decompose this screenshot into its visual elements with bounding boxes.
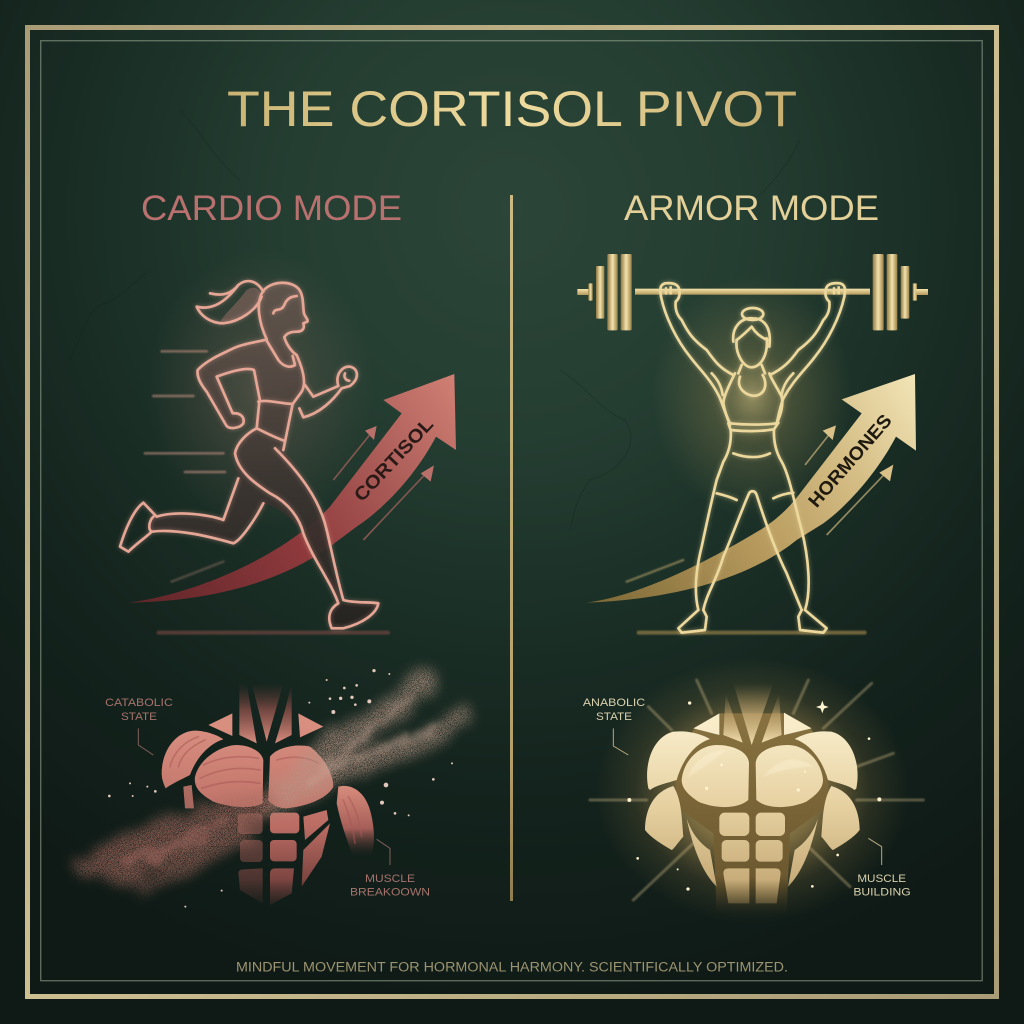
dust wisps lower [120, 820, 227, 867]
title: THE CORTISOL PIVOT [227, 81, 797, 137]
runner silhouette [150, 283, 378, 628]
arrow label: HORMONES [804, 410, 896, 511]
sparkles [627, 701, 881, 891]
label: muscle building: BUILDING [853, 887, 911, 899]
label: catabolic state [105, 697, 173, 755]
heading: cardio mode: CARDIO MODE [141, 189, 402, 228]
panel: anabolic muscle building [583, 657, 923, 923]
label: anabolic state [583, 697, 645, 755]
label: anabolic state: ANABOLIC [583, 697, 645, 709]
label: muscle breakdown [350, 839, 430, 899]
torso muscles [162, 683, 374, 905]
pectoral highlights [688, 750, 813, 777]
panel: cardio runner [120, 250, 456, 635]
dust cloud lower left [83, 805, 267, 887]
muscle groups [645, 683, 860, 903]
dust cloud upper right [270, 683, 457, 803]
hormones arrow [587, 374, 916, 603]
torso base [675, 713, 830, 913]
torso glow [596, 657, 909, 923]
ground shadow [157, 631, 390, 635]
barbell [577, 254, 928, 330]
runner outline [120, 281, 378, 628]
marble cracks texture [70, 110, 800, 530]
center divider [510, 195, 513, 901]
light rays [590, 680, 923, 900]
label: catabolic state: CATABOLIC [105, 697, 173, 709]
small upward arrows [805, 425, 893, 535]
ground shadow [637, 631, 867, 635]
dust particles [108, 669, 453, 908]
panel: catabolic muscle breakdown [83, 669, 457, 908]
speed line [627, 560, 683, 582]
label: anabolic state: STATE [596, 711, 632, 723]
heading: armor mode: ARMOR MODE [624, 189, 879, 228]
panel: armor lifter [577, 254, 928, 635]
speed lines [145, 351, 225, 582]
small upward arrows [333, 426, 434, 540]
lifter outline [660, 283, 845, 633]
dust wisps upper [310, 700, 440, 783]
label: muscle building [853, 838, 911, 899]
footer tagline: MINDFUL MOVEMENT FOR HORMONAL HARMONY. SCIENTIFICALLY OPTIMIZED. [236, 960, 788, 974]
muscle striations [170, 737, 362, 843]
label: muscle breakdown: BREAKOOWN [350, 887, 430, 899]
label: muscle building: MUSCLE [857, 873, 906, 885]
cortisol arrow [128, 374, 456, 603]
label: muscle breakdown: MUSCLE [365, 873, 415, 885]
arrow label: CORTISOL [350, 414, 437, 505]
ponytail shading [221, 288, 262, 323]
label: catabolic state: STATE [121, 711, 157, 723]
